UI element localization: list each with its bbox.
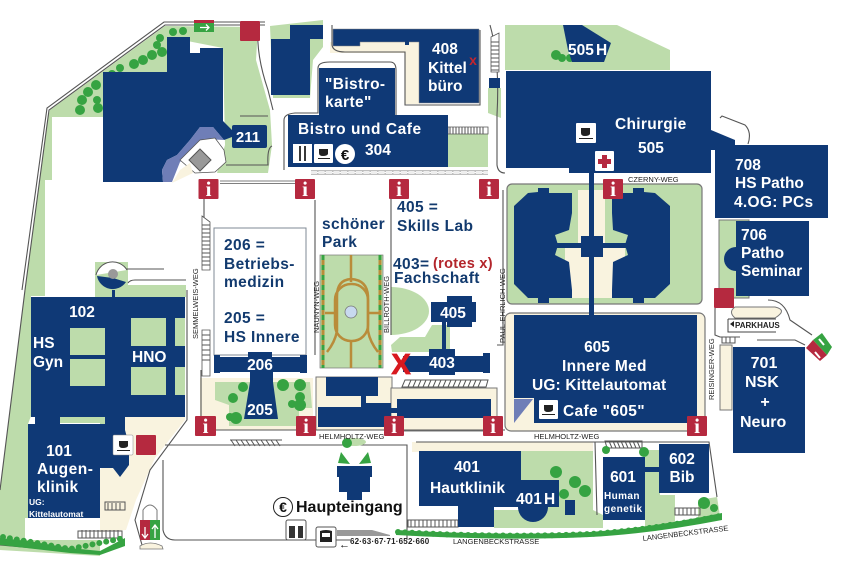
street labels (191, 175, 729, 546)
icon: coffee (539, 400, 558, 419)
info marker (295, 177, 315, 201)
building: 701 NSK + Neuro: NSK (745, 374, 779, 391)
building: 708 HS Patho: HS Patho (735, 175, 804, 192)
info marker: i (486, 177, 492, 201)
icon: euro (335, 144, 355, 164)
building: 601 Humangenetik: Human (604, 491, 640, 502)
building: 701 NSK + Neuro (733, 347, 805, 453)
building: 601 Humangenetik: genetik (604, 504, 643, 515)
street labels: CZERNY-WEG (628, 175, 679, 184)
building: 405 and 403: 405 (440, 305, 466, 322)
red plain marker left (136, 435, 156, 455)
building: 602 Bib: 602 (669, 451, 695, 468)
building: 602 Bib (659, 444, 709, 493)
label: schoener Park: schöner (322, 216, 385, 233)
building: 602 Bib: Bib (670, 469, 694, 486)
label: 405 Skills Lab (397, 199, 473, 235)
red info markers (195, 177, 707, 438)
building: Chirurgie 505: Chirurgie (615, 116, 687, 133)
building: 102 HS Gyn HNO: Gyn (33, 354, 63, 371)
icon: bus (316, 527, 336, 547)
entrance rotunda (162, 127, 226, 183)
building: 605 Innere Med: Cafe "605" (563, 403, 645, 420)
label box: 206 / 205 legend: 206 = (224, 237, 265, 254)
icon: red cross (595, 151, 614, 171)
label: schoener Park (322, 216, 385, 251)
info marker: i (610, 177, 616, 201)
label: 403 Fachschaft (393, 256, 493, 287)
building: 405 and 403: 403 (429, 355, 455, 372)
label: schoener Park: Park (322, 234, 357, 251)
label: Haupteingang: € (279, 499, 287, 515)
building: 408 Kittelbuero: x (469, 52, 477, 68)
info marker (389, 177, 409, 201)
info marker: i (694, 414, 700, 438)
small shed (565, 500, 575, 515)
building: 505H: 505 (568, 42, 594, 59)
icon: vending (286, 520, 306, 540)
building: 701 NSK + Neuro: + (760, 394, 770, 411)
label: 405 Skills Lab: 405 = (397, 199, 438, 216)
building: 401 Hautklinik: 401 (516, 491, 542, 508)
sign: Parkhaus (728, 319, 780, 332)
icon: restaurant (293, 144, 312, 163)
building: 102 HS Gyn HNO: HNO (132, 349, 166, 366)
icon: coffee (314, 144, 333, 163)
building: 206 and 205: 205 (247, 402, 273, 419)
info marker: i (303, 414, 309, 438)
building: 706 Patho Seminar: 706 (741, 227, 767, 244)
label: 405 Skills Lab: Skills Lab (397, 218, 473, 235)
building: Bistro und Cafe 304 (288, 115, 448, 167)
info marker: i (203, 414, 209, 438)
label: 403 Fachschaft: (rotes x) (433, 256, 493, 272)
building: 102 HS Gyn HNO: 102 (69, 304, 95, 321)
street labels: HELMHOLTZ-WEG (319, 432, 384, 441)
info marker (483, 414, 503, 438)
building: 505H (563, 25, 611, 62)
building: centre bottom block (318, 377, 491, 427)
building: 601 Humangenetik: 601 (610, 469, 636, 486)
red plain marker top (240, 21, 260, 41)
hedges and trees (0, 27, 722, 555)
info marker (479, 177, 499, 201)
building: 701 NSK + Neuro: Neuro (740, 414, 786, 431)
building: Chirurgie 505: 505 (638, 140, 664, 157)
label box: 206 / 205 legend: 205 = (224, 310, 265, 327)
sign: Parkhaus: PARKHAUS (735, 321, 780, 330)
building: 708 HS Patho (715, 145, 828, 218)
building: 206 and 205: 206 (247, 357, 273, 374)
street labels: REISINGER-WEG (707, 338, 716, 400)
info marker (198, 177, 218, 201)
info marker: i (396, 177, 402, 201)
small link (489, 78, 500, 88)
sign: bottom entry exit (140, 505, 163, 549)
building: 708 HS Patho: 4.OG: PCs (734, 194, 813, 211)
label box: 206 / 205 legend: medizin (224, 274, 285, 291)
building: 706 Patho Seminar: Seminar (741, 263, 802, 280)
bus line numbers: 62·63·67·71·652·660 (350, 537, 430, 546)
building: 505H: H (596, 42, 607, 59)
building: Bistro und Cafe 304: Bistro und Cafe (298, 121, 422, 138)
label: 403 Fachschaft: 403= (393, 256, 430, 273)
building: Bistrokarte: "Bistro- (325, 76, 386, 93)
info marker: i (302, 177, 308, 201)
building: 708 HS Patho: 708 (735, 157, 761, 174)
info marker (195, 414, 216, 438)
building: 600 twin wings (514, 170, 670, 318)
info marker (296, 414, 316, 438)
building: 101 Augenklinik: 101 (46, 443, 72, 460)
building: 408 Kittelbuero (333, 29, 479, 103)
building: main entrance kiosk (337, 466, 372, 500)
street labels: SEMMELWEIS-WEG (191, 268, 200, 339)
label box: 206 / 205 legend: Betriebs- (224, 256, 295, 273)
building: 401 Hautklinik: H (544, 491, 555, 508)
street grey (337, 530, 390, 536)
park (320, 255, 383, 368)
building: 401 Hautklinik: 401 (454, 459, 480, 476)
building: 605 Innere Med: Innere Med (562, 358, 647, 375)
marker: red X: X (391, 349, 411, 381)
hatched path strips (78, 33, 735, 538)
street labels: BILLROTH-WEG (382, 276, 391, 333)
building: 101 Augenklinik: klinik (37, 479, 79, 496)
building: 706 Patho Seminar: Patho (741, 245, 784, 262)
building: 102 HS Gyn HNO: HS (33, 335, 55, 352)
bus line numbers: ← (339, 539, 350, 551)
info marker: i (206, 177, 212, 201)
building: 206 and 205 (214, 352, 307, 419)
label: 403 Fachschaft: Fachschaft (394, 270, 480, 287)
building: Bistrokarte: karte" (325, 94, 372, 111)
icon: coffee 101 (113, 435, 133, 455)
building: Chirurgie 505 (506, 71, 735, 173)
building: 101 Augenklinik: Augen- (37, 461, 93, 478)
info marker: i (490, 414, 496, 438)
sign: top exit (194, 20, 214, 32)
label: Haupteingang: Haupteingang (296, 499, 403, 516)
label box: 206 / 205 legend: HS Innere (224, 329, 300, 346)
info marker (687, 414, 707, 438)
rotunda near 102 (96, 262, 127, 298)
building: 401 Hautklinik: Hautklinik (430, 480, 505, 497)
street labels: LANGENBECKSTRASSE (642, 524, 729, 543)
bus line numbers (339, 537, 430, 551)
info marker (384, 414, 404, 438)
building: 408 Kittelbuero: büro (428, 78, 462, 95)
icon: euro: € (341, 147, 350, 164)
label box: 206 / 205 legend (214, 228, 306, 355)
building: Bistro und Cafe 304: 304 (365, 142, 391, 159)
street labels: HELMHOLTZ-WEG (534, 432, 599, 441)
building: 701 NSK + Neuro: 701 (751, 355, 777, 372)
building: 605 Innere Med: UG: Kittelautomat (532, 377, 666, 394)
red plain marker right (714, 288, 734, 308)
building: 408 Kittelbuero: 408 (432, 41, 458, 58)
label: 211: 211 (236, 129, 260, 146)
building: 706 Patho Seminar (724, 221, 809, 296)
building: 405 and 403 (403, 296, 490, 375)
building: 601 Humangenetik (603, 457, 659, 520)
building: main 211 complex (103, 37, 267, 182)
building: 408 Kittelbuero: Kittel (428, 60, 467, 77)
building: 102 HS Gyn HNO (31, 297, 185, 417)
building: 605 Innere Med: 605 (584, 339, 610, 356)
info marker: i (391, 414, 397, 438)
building: 605 Innere Med (514, 315, 697, 423)
sign: right entry exit (806, 333, 832, 361)
building: top small (271, 25, 323, 95)
building: Bistrokarte (319, 68, 395, 116)
building: 401 Hautklinik (419, 451, 559, 527)
building: 101 Augenklinik: UG: (29, 497, 45, 507)
street labels: PAUL-EHRLICH-WEG (498, 268, 507, 343)
building: 101 Augenklinik (28, 417, 129, 519)
street labels: NAUNYN-WEG (312, 281, 321, 333)
street labels: LANGENBECKSTRASSE (453, 537, 539, 546)
building: 101 Augenklinik: Kittelautomat (29, 509, 83, 519)
icon: coffee (576, 123, 596, 143)
info marker (603, 177, 623, 201)
